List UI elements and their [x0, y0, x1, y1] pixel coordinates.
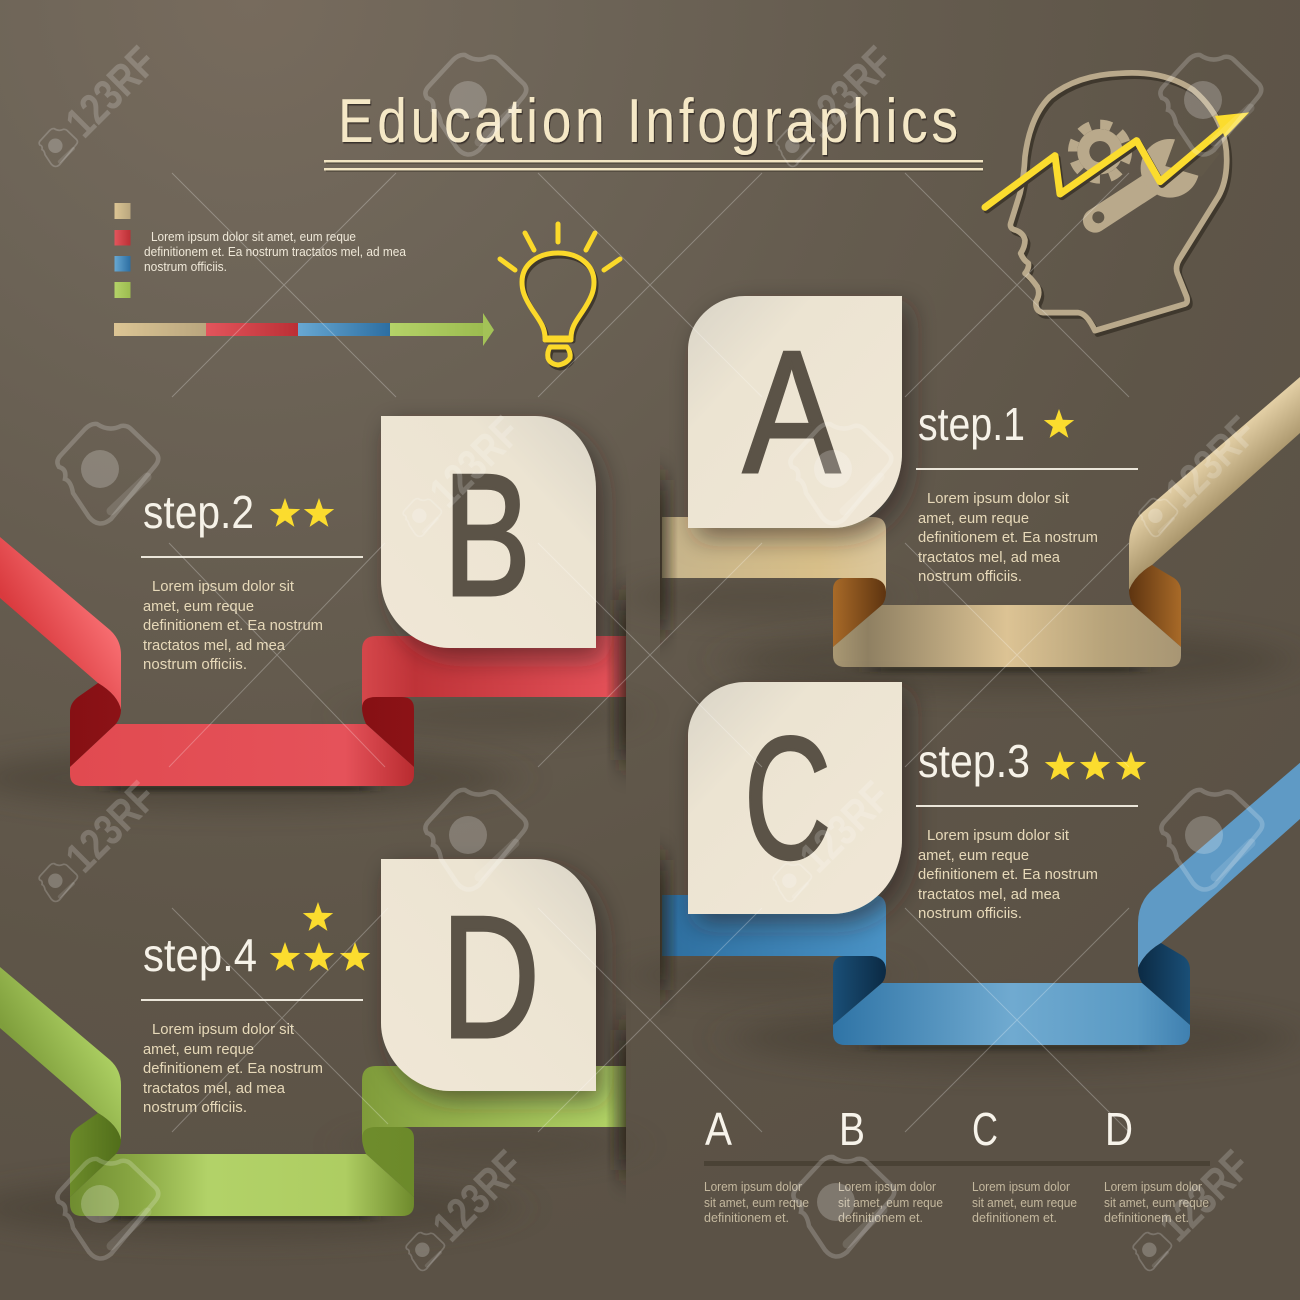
card C	[688, 682, 902, 914]
step 1 text: nostrum officiis.	[918, 568, 1022, 585]
column B	[838, 1103, 943, 1225]
step 4 text: definitionem et. Ea nostrum	[143, 1060, 323, 1077]
panel: step 2 ribbon B	[0, 416, 626, 786]
watermark: 123RF stamps: 123RF	[790, 772, 900, 882]
watermark: 123RF stamps: 123RF	[56, 37, 166, 147]
card A: A	[743, 314, 840, 509]
step 1 text: amet, eum reque	[918, 510, 1029, 527]
title: Education Infographics	[338, 87, 958, 156]
legend text: Lorem ipsum dolor sit amet, eum reque	[151, 230, 356, 244]
step 3 text: tractatos mel, ad mea	[918, 886, 1061, 903]
icon: gear	[1073, 124, 1127, 179]
panel: step 1 ribbon A	[662, 296, 1300, 667]
watermark: 123RF stamps: 123RF	[1150, 1141, 1260, 1251]
column B: sit amet, eum reque	[838, 1196, 943, 1210]
card A	[688, 296, 902, 528]
column C: Lorem ipsum dolor	[972, 1180, 1070, 1194]
icon: wrench	[1092, 135, 1220, 223]
panel: step 3 ribbon C	[662, 682, 1300, 1045]
step 4 text: amet, eum reque	[143, 1041, 254, 1058]
blue ribbon	[662, 755, 1300, 1045]
watermark crossing lines	[169, 173, 1129, 1132]
card D	[381, 859, 596, 1091]
column C	[972, 1103, 1077, 1225]
step 2 text: tractatos mel, ad mea	[143, 637, 286, 654]
watermark: 123RF stamps: 123RF	[1156, 407, 1266, 517]
card C: C	[744, 700, 831, 895]
step 4 text: nostrum officiis.	[143, 1099, 247, 1116]
column D: D	[1105, 1103, 1133, 1155]
step 4 text: tractatos mel, ad mea	[143, 1080, 286, 1097]
step 3 heading: step.3	[918, 735, 1030, 787]
step 1 heading: step.1	[918, 398, 1025, 450]
step 3 text: Lorem ipsum dolor sit	[927, 827, 1070, 844]
column B: definitionem et.	[838, 1211, 923, 1225]
watermark: 123RF stamps: 123RF	[423, 1141, 533, 1251]
step 3 text: nostrum officiis.	[918, 905, 1022, 922]
column D: Lorem ipsum dolor	[1104, 1180, 1202, 1194]
step 1 text: definitionem et. Ea nostrum	[918, 529, 1098, 546]
colour progress arrow	[114, 313, 494, 346]
icon: yellow rising arrow	[985, 112, 1249, 210]
column D	[1104, 1103, 1209, 1225]
card B: B	[443, 437, 531, 632]
step 1 text	[918, 490, 1098, 585]
tan ribbon	[662, 377, 1300, 667]
step 3 text: definitionem et. Ea nostrum	[918, 866, 1098, 883]
step 4 text	[143, 1021, 323, 1116]
icon: light bulb	[500, 224, 620, 368]
watermark: 123RF stamps: 123RF	[420, 407, 530, 517]
column C: sit amet, eum reque	[972, 1196, 1077, 1210]
column A: sit amet, eum reque	[704, 1196, 809, 1210]
column A: definitionem et.	[704, 1211, 789, 1225]
step 4 heading	[141, 902, 370, 1001]
step 3 text	[918, 827, 1098, 922]
column C: C	[972, 1103, 998, 1155]
legend text: nostrum officiis.	[144, 260, 227, 274]
step 2 text: nostrum officiis.	[143, 656, 247, 673]
step 2 text: definitionem et. Ea nostrum	[143, 617, 323, 634]
bottom summary table	[704, 1103, 1210, 1225]
step 2 text: Lorem ipsum dolor sit	[152, 578, 295, 595]
watermark: 123RF stamps: 123RF	[793, 37, 903, 147]
column A	[704, 1103, 809, 1225]
step 2 text	[143, 578, 323, 673]
legend swatches	[114, 203, 130, 298]
step 2 heading	[141, 486, 363, 558]
step 1 text: tractatos mel, ad mea	[918, 549, 1061, 566]
column D: definitionem et.	[1104, 1211, 1189, 1225]
legend text: definitionem et. Ea nostrum tractatos mel, ad mea	[144, 245, 406, 259]
watermark: 123RF stamps: 123RF	[56, 772, 166, 882]
legend text	[144, 230, 406, 274]
green ribbon	[0, 967, 626, 1216]
step 2 heading: step.2	[143, 486, 254, 538]
step 4 heading: step.4	[143, 929, 257, 981]
column B: Lorem ipsum dolor	[838, 1180, 936, 1194]
step 2 text: amet, eum reque	[143, 598, 254, 615]
column D: sit amet, eum reque	[1104, 1196, 1209, 1210]
column B: B	[839, 1103, 865, 1155]
panel: step 4 ribbon D	[0, 859, 626, 1216]
column A: A	[705, 1103, 732, 1155]
step 3 text: amet, eum reque	[918, 847, 1029, 864]
step 1 heading	[916, 398, 1138, 470]
step 1 text: Lorem ipsum dolor sit	[927, 490, 1070, 507]
vertical edge shadows at the ribbon ends	[606, 480, 678, 1170]
icon: head with gear, wrench and rising arrow	[985, 73, 1249, 334]
step 4 text: Lorem ipsum dolor sit	[152, 1021, 295, 1038]
step 3 heading	[916, 735, 1146, 807]
column C: definitionem et.	[972, 1211, 1057, 1225]
card B	[381, 416, 596, 648]
red ribbon	[0, 537, 626, 786]
card D: D	[441, 879, 540, 1074]
column A: Lorem ipsum dolor	[704, 1180, 802, 1194]
